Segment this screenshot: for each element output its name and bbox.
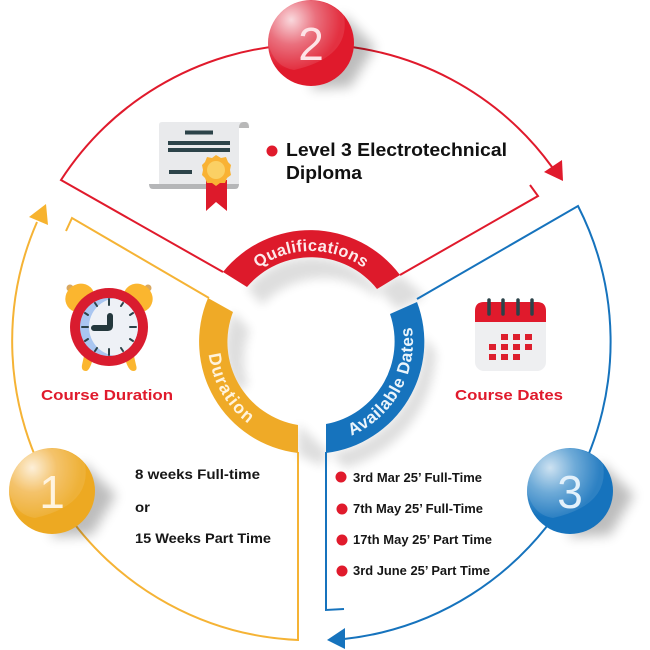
qualification line 1: Level 3 Electrotechnical xyxy=(286,139,507,160)
duration label: Duration xyxy=(208,353,252,423)
heading: course dates: Course Dates xyxy=(455,387,563,404)
text: duration details xyxy=(135,466,271,546)
sphere 2: 2 xyxy=(298,18,324,70)
panel: duration ring arc and outline xyxy=(11,204,299,641)
date 4: 3rd June 25’ Part Time xyxy=(353,563,490,578)
red arrowhead xyxy=(544,160,563,181)
text: qualification name xyxy=(286,139,507,183)
blue outline xyxy=(326,206,611,639)
qualifications label: Qualifications xyxy=(254,239,367,266)
available dates label: Available Dates xyxy=(350,328,414,436)
blue ring segment xyxy=(326,302,424,453)
red outline xyxy=(61,44,552,275)
panel: available dates ring arc and outline xyxy=(325,204,612,649)
sphere 3: 3 xyxy=(557,466,583,518)
red ring segment xyxy=(223,230,400,289)
sphere 2 xyxy=(268,0,375,89)
list: available dates xyxy=(336,470,492,578)
bullet: qualification xyxy=(266,146,278,156)
duration line 1: 8 weeks Full-time xyxy=(135,466,260,482)
icon: certificate xyxy=(149,122,249,211)
blue arrowhead xyxy=(327,628,345,649)
sphere 1: 1 xyxy=(39,466,65,518)
duration line 2: or xyxy=(135,499,151,515)
heading: course duration: Course Duration xyxy=(41,387,173,404)
icon: alarm clock xyxy=(65,284,153,371)
panel: qualifications ring arc and outline xyxy=(60,46,563,289)
duration line 3: 15 Weeks Part Time xyxy=(135,530,271,546)
yellow arrowhead xyxy=(29,204,48,225)
sphere 3 xyxy=(527,448,634,537)
date 3: 17th May 25’ Part Time xyxy=(353,532,492,547)
sphere 1 xyxy=(9,448,116,537)
date 1: 3rd Mar 25’ Full-Time xyxy=(353,470,482,485)
yellow outline xyxy=(12,218,298,640)
ring shadows xyxy=(225,257,436,468)
yellow ring segment xyxy=(199,298,298,453)
qualification line 2: Diploma xyxy=(286,162,363,183)
icon: calendar xyxy=(475,300,546,371)
date 2: 7th May 25’ Full-Time xyxy=(353,501,483,516)
